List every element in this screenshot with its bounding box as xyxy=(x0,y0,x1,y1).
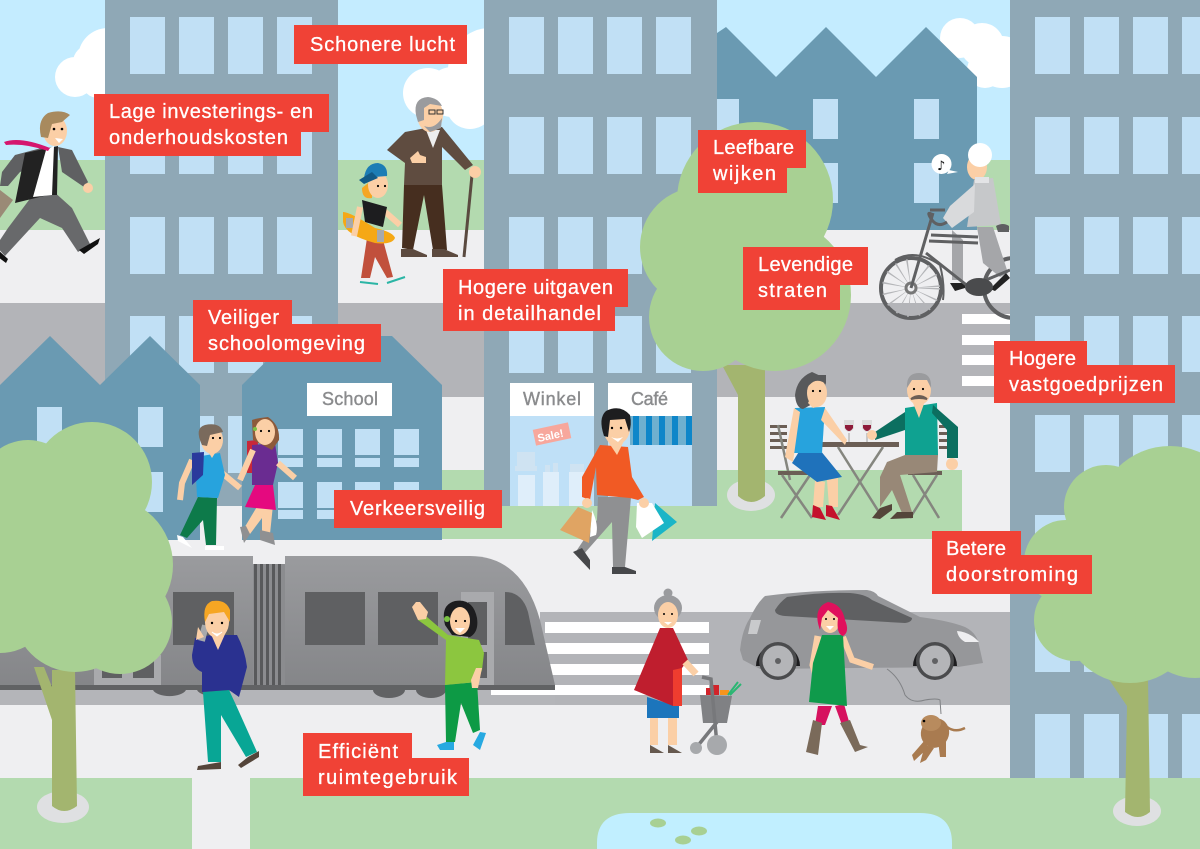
label: Efficiënt ruimtegebruik: Efficiënt xyxy=(318,741,398,763)
icon: speech bubble with music note: ♪ xyxy=(937,159,945,174)
label: Hogere vastgoedprijzen: vastgoedprijzen xyxy=(1009,374,1163,396)
label: Betere doorstroming: Betere xyxy=(946,538,1006,560)
label: Lage investerings- en onderhoudskosten: onderhoudskosten xyxy=(109,127,288,149)
label: Efficiënt ruimtegebruik xyxy=(303,733,469,796)
shopping trolley xyxy=(690,677,741,755)
building: left houses xyxy=(0,336,200,540)
label: Hogere uitgaven in detailhandel: Hogere uitgaven xyxy=(458,277,613,299)
person: shopper with bags xyxy=(560,408,677,574)
label: Hogere uitgaven in detailhandel xyxy=(443,269,628,331)
label: Hogere vastgoedprijzen: Hogere xyxy=(1009,348,1076,370)
shop window: Café with awning xyxy=(608,383,692,506)
table xyxy=(820,442,899,517)
label: Lage investerings- en onderhoudskosten xyxy=(94,94,329,156)
person: woman seated xyxy=(785,372,847,520)
tree: right xyxy=(1024,446,1200,826)
person: elderly woman with shopping trolley xyxy=(634,588,741,755)
shop window: Winkel xyxy=(510,383,594,506)
tree: centre xyxy=(640,122,851,511)
building: back row houses xyxy=(717,27,977,230)
label: Hogere uitgaven in detailhandel: in detailhandel xyxy=(458,303,601,325)
building: school: School xyxy=(322,389,378,409)
person: woman with pink hair walking dog xyxy=(806,602,873,755)
label: Levendige straten: straten xyxy=(758,280,827,302)
label: Leefbare wijken: Leefbare xyxy=(713,137,794,159)
label: Betere doorstroming: doorstroming xyxy=(946,564,1078,586)
chair: left xyxy=(770,425,812,518)
label: Verkeersveilig xyxy=(334,490,502,528)
label: Veiliger schoolomgeving: schoolomgeving xyxy=(208,333,365,355)
label: Schonere lucht: Schonere lucht xyxy=(310,34,455,56)
label: Leefbare wijken xyxy=(698,130,806,193)
chair: right xyxy=(908,425,948,518)
car xyxy=(740,590,983,680)
pond with lily pads xyxy=(597,813,952,849)
label: Leefbare wijken: wijken xyxy=(712,163,776,185)
person: schoolgirl with backpack xyxy=(240,417,295,545)
zebra crossing: upper right xyxy=(962,314,1010,386)
person: child with skateboard xyxy=(343,163,405,284)
building: school xyxy=(242,336,442,540)
label: Lage investerings- en onderhoudskosten: Lage investerings- en xyxy=(109,101,313,123)
shop window: Winkel: Sale! xyxy=(536,428,565,445)
person: elderly man with cane xyxy=(387,97,481,257)
label: Hogere vastgoedprijzen xyxy=(994,341,1175,403)
icon: speech bubble with music note xyxy=(931,154,958,174)
label: Betere doorstroming xyxy=(932,531,1092,594)
person: schoolboy with backpack xyxy=(177,424,240,550)
building: left office block xyxy=(105,0,338,506)
person: man on phone xyxy=(192,601,259,770)
person: woman waving xyxy=(412,601,486,750)
shop window: Winkel: Winkel xyxy=(523,389,581,409)
label: Veiliger schoolomgeving xyxy=(193,300,381,362)
terrace: table, chairs and seated couple xyxy=(770,372,958,520)
label: Verkeersveilig: Verkeersveilig xyxy=(350,498,485,520)
dog on leash xyxy=(887,669,965,763)
zebra crossing: lower xyxy=(491,622,709,695)
person: man seated xyxy=(867,373,958,519)
label: Levendige straten: Levendige xyxy=(758,254,853,276)
person: businessman running xyxy=(0,111,100,263)
building: right office block xyxy=(1010,0,1200,778)
tree: left xyxy=(0,422,173,823)
building: centre block with shops xyxy=(484,0,717,506)
label: Efficiënt ruimtegebruik: ruimtegebruik xyxy=(318,767,458,789)
clouds xyxy=(55,18,1028,129)
shop window: Café with awning: Café xyxy=(631,389,668,409)
tram xyxy=(0,556,555,698)
label: Schonere lucht xyxy=(294,25,467,64)
wine glasses xyxy=(844,420,872,442)
label: Veiliger schoolomgeving: Veiliger xyxy=(208,307,279,329)
person: cyclist with bicycle xyxy=(879,143,1010,320)
label: Levendige straten xyxy=(743,247,868,310)
